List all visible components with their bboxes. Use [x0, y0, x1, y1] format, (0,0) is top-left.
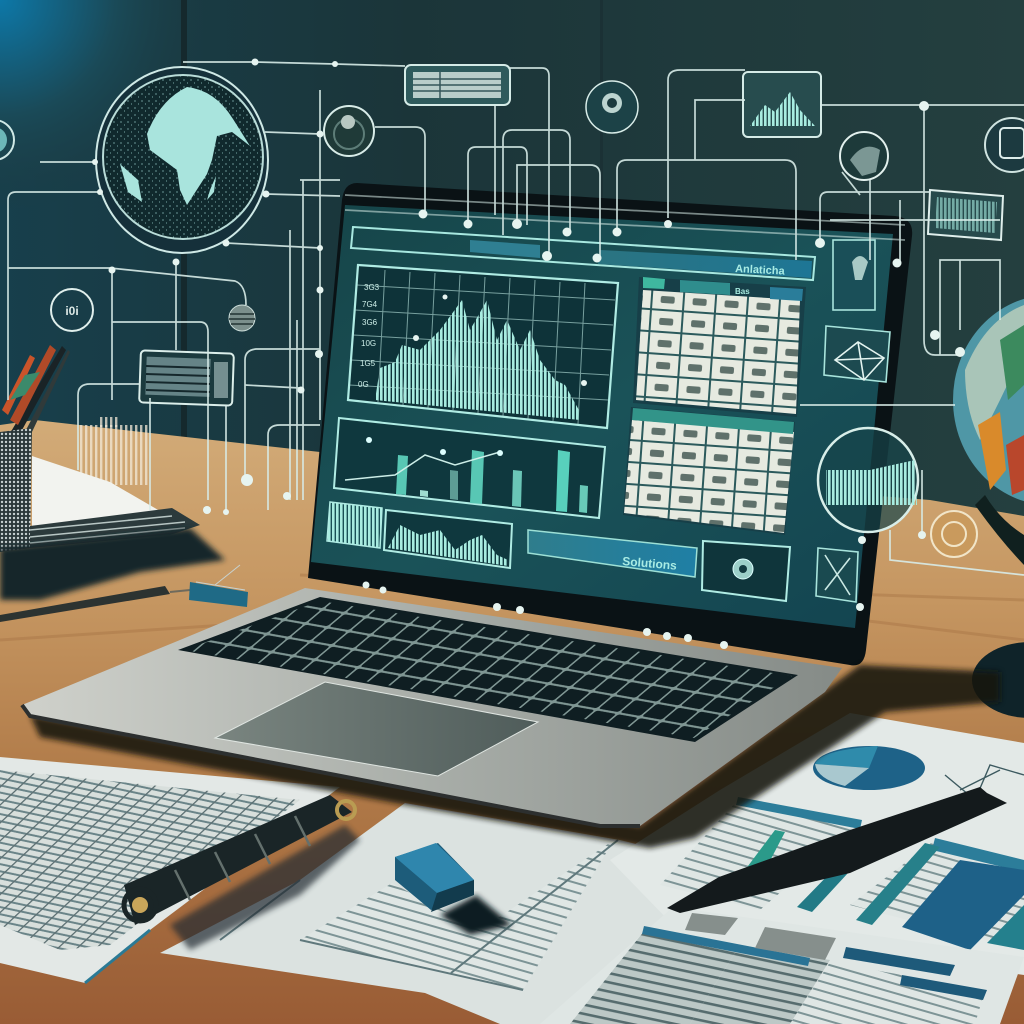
- icon: partial circle left edge: [0, 120, 14, 160]
- connector nodes: [92, 58, 965, 649]
- icon: top data panel: [405, 65, 510, 105]
- main area chart: 1G5: [360, 359, 376, 368]
- data table top: Bas: [735, 287, 750, 296]
- solutions bar: Solutions: [622, 554, 678, 573]
- connector lines: [8, 62, 1024, 575]
- icon: people circle: [51, 289, 93, 331]
- magnifier with waveform: [818, 428, 918, 532]
- wooden desk: [0, 420, 1024, 1024]
- laptop base: [22, 588, 842, 826]
- pen on desk: [0, 586, 190, 622]
- main area chart: 3G3: [364, 283, 380, 292]
- binder clip: [189, 565, 248, 607]
- notebook shadow: [0, 528, 225, 600]
- back paper with table: [160, 803, 860, 1024]
- pen holder with pencils: [0, 345, 70, 552]
- ink pen: [667, 787, 1007, 913]
- screen header bar with title: Anlaticha: [735, 263, 786, 278]
- desktop globe, right: [953, 295, 1024, 718]
- trackpad: [215, 682, 538, 776]
- translucent bar chart over desk: [78, 417, 150, 485]
- stacked notebook: [30, 456, 200, 548]
- screen header bar with title: [351, 227, 815, 280]
- binder shadow: [170, 825, 360, 950]
- keyboard: [178, 597, 798, 742]
- main area chart: [348, 265, 618, 428]
- pie chart: [813, 746, 925, 790]
- lower right table sheet: [540, 907, 1024, 1024]
- keyboard-like panel: [139, 350, 234, 406]
- main area chart: 0G: [358, 380, 369, 389]
- blue eraser block: [395, 843, 512, 935]
- data table top: [633, 277, 806, 417]
- left spreadsheet notebook: [0, 757, 340, 983]
- laptop shadow: [30, 665, 1000, 848]
- laptop lid: [308, 183, 912, 665]
- data table bottom: [623, 407, 795, 535]
- icon: sloped panel right: [928, 190, 1003, 240]
- right report sheet: [610, 713, 1024, 975]
- main area chart: 10G: [361, 339, 376, 348]
- widget: small image tile: [816, 548, 858, 602]
- icon: small lens: [324, 106, 374, 156]
- icon: right edge badge: [985, 118, 1024, 172]
- solutions bar: [528, 530, 697, 577]
- icon: people circle: i0i: [65, 304, 79, 318]
- main area chart: 3G6: [362, 318, 378, 327]
- binder spiral: [124, 795, 355, 925]
- bar and line chart: [334, 418, 605, 518]
- coin icon on desk: [931, 511, 977, 557]
- line chart sketch: [945, 765, 1024, 800]
- wall background: [0, 0, 1024, 560]
- icon: large earth globe: [96, 67, 268, 253]
- screen emblem panel: [702, 541, 790, 601]
- icon: location pin circle: [586, 81, 638, 133]
- main area chart: 7G4: [362, 300, 378, 309]
- widget: device panel: [833, 240, 875, 310]
- icon: mini chart panel: [743, 72, 821, 137]
- right side screen widgets: [816, 240, 890, 602]
- lower waveform panels: [327, 502, 512, 568]
- widget: cube diagram: [824, 326, 890, 382]
- icon: small mesh sphere: [229, 305, 255, 331]
- icon: lens top right: [840, 132, 888, 180]
